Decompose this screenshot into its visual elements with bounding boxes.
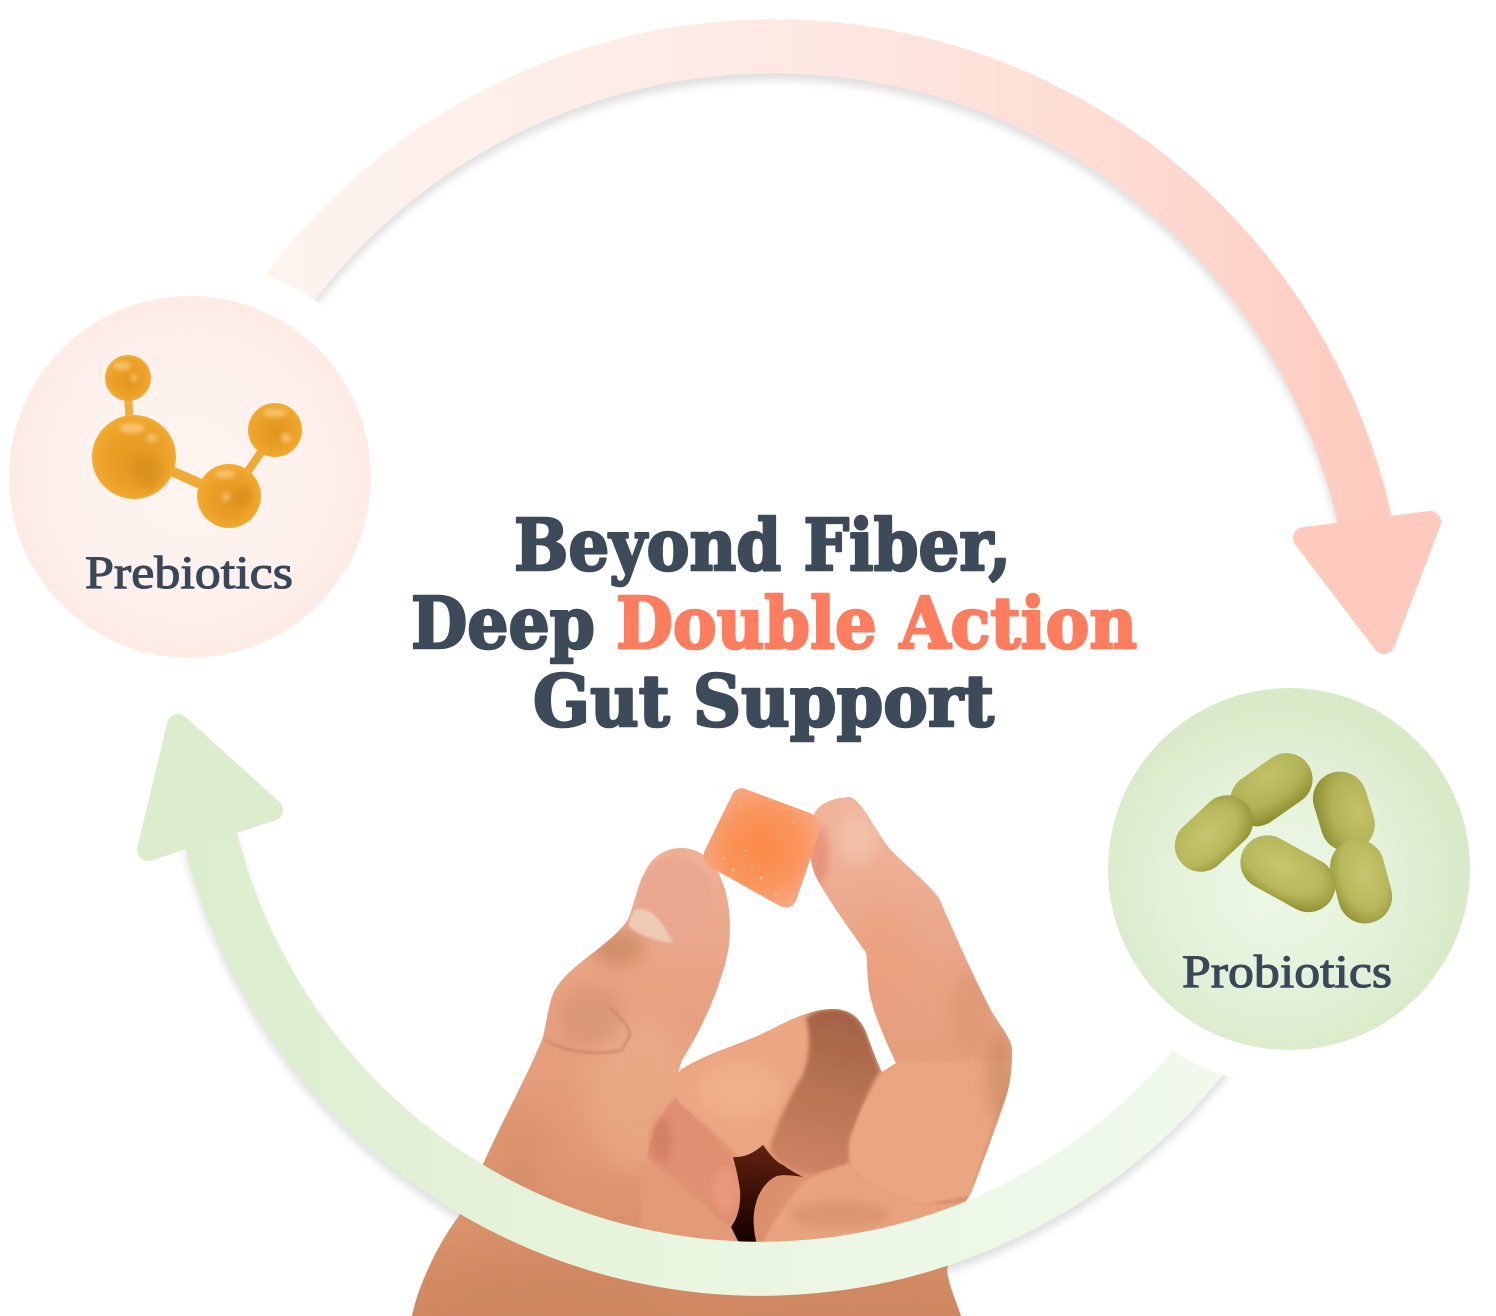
index base bbox=[850, 1060, 1012, 1205]
gummy bbox=[704, 788, 820, 907]
arc: bottom, probiotics to prebiotics bbox=[210, 836, 1240, 1269]
hand silhouette bbox=[412, 797, 1012, 1316]
title bbox=[411, 503, 1137, 743]
thumb web bbox=[641, 1188, 738, 1241]
thumbnail bbox=[629, 856, 711, 943]
title line 2: highlight: Double Action bbox=[616, 581, 1137, 665]
title line 3: Gut Support bbox=[533, 659, 994, 743]
icon: molecule bbox=[92, 355, 302, 528]
palm pit bbox=[731, 1145, 803, 1245]
panel: prebiotics bbox=[0, 261, 406, 693]
hand shading bbox=[490, 815, 1012, 1242]
icon: capsules bbox=[1164, 743, 1398, 930]
arrowhead: top arc bbox=[1304, 522, 1430, 643]
thumbnail tip bbox=[629, 909, 673, 943]
middle finger shadow side bbox=[770, 1009, 880, 1175]
palm fold bbox=[762, 1164, 960, 1242]
small finger bbox=[754, 1175, 802, 1229]
arc shadows bbox=[210, 53, 1365, 1276]
arc: top, prebiotics to probiotics bbox=[254, 46, 1365, 522]
middle finger lit part bbox=[694, 1009, 875, 1156]
title line 2: dark part: Deep bbox=[411, 581, 595, 665]
ring finger bbox=[647, 1098, 730, 1226]
panel: probiotics bbox=[1073, 653, 1496, 1085]
hand holding gummy bbox=[412, 788, 1012, 1316]
arrowhead: bottom arc bbox=[148, 725, 272, 850]
title line 1: Beyond Fiber, bbox=[514, 503, 1011, 587]
label: probiotics: Probiotics bbox=[1182, 946, 1392, 998]
label: prebiotics: Prebiotics bbox=[85, 547, 293, 599]
